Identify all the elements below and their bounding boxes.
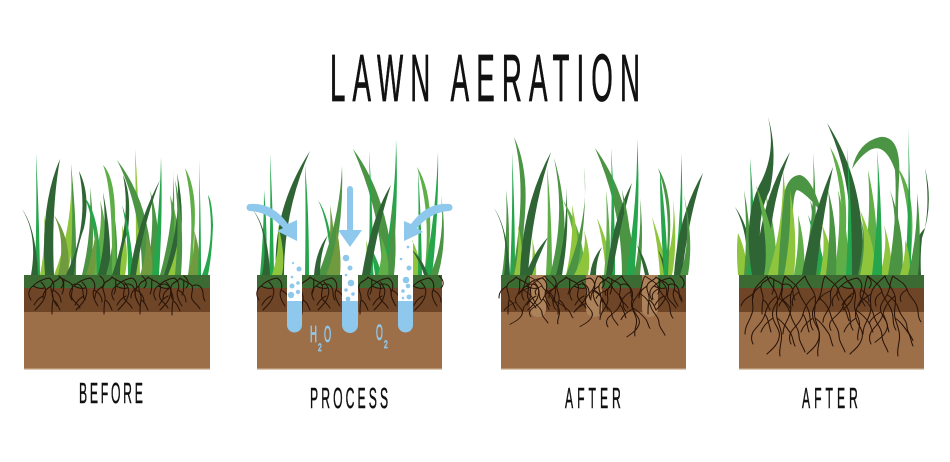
label: H2O: 2: [318, 341, 322, 353]
panel: after 1: [494, 137, 703, 370]
title: LAWN AERATION: [330, 41, 640, 115]
label: H2O: [310, 321, 331, 353]
roots: after 1: [499, 276, 684, 337]
grass: after 1: [494, 137, 703, 275]
soil: before: [24, 275, 210, 370]
arrow: right: [404, 204, 453, 241]
grass: process: [253, 139, 444, 275]
label: O2: 2: [384, 338, 388, 350]
panel: after 2: [735, 117, 929, 370]
panel: before: [22, 149, 213, 370]
bubbles: [288, 246, 412, 301]
soil: process: [257, 275, 442, 370]
label: before: BEFORE: [79, 377, 143, 410]
label: H2O: H: [310, 321, 317, 347]
label: O2: [376, 320, 388, 350]
soil: after 2: [739, 275, 924, 370]
arrow: left: [246, 204, 297, 241]
label: after 1: AFTER: [565, 382, 621, 415]
grass: after 2: [735, 117, 929, 275]
panel: process: [246, 139, 453, 370]
arrow: center: [338, 186, 362, 247]
label: after 2: AFTER: [802, 382, 858, 415]
roots: before: [29, 276, 205, 315]
grass: before: [22, 149, 213, 275]
roots: after 2: [741, 276, 921, 356]
label: H2O: O: [324, 321, 331, 347]
soil: after 1: [501, 275, 686, 370]
roots: process: [257, 276, 443, 314]
aeration holes: [287, 238, 413, 333]
filled aeration plugs: [530, 275, 658, 317]
label: process: PROCESS: [310, 382, 388, 415]
label: O2: O: [376, 320, 383, 345]
